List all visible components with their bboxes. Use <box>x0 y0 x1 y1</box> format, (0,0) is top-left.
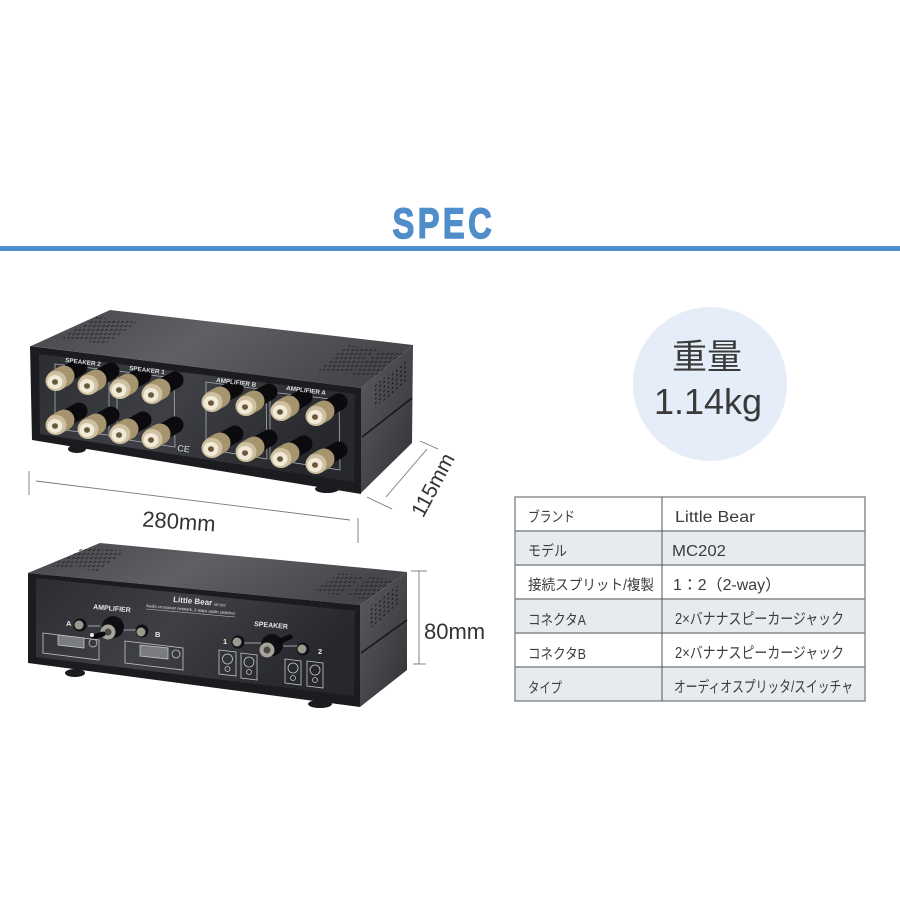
panel labels: Little Bear MC202 <box>173 595 226 609</box>
table right column <box>672 509 853 696</box>
table right column: Little Bear <box>675 509 755 526</box>
table grid <box>515 497 865 701</box>
binding post jacks <box>46 367 79 391</box>
width dimension: 280mm <box>29 471 358 543</box>
table left column: 接続スプリット/複製 <box>528 577 654 594</box>
top face <box>28 543 407 605</box>
panel labels: SPEAKER <box>254 621 288 631</box>
product photo: rear panel with terminals <box>30 310 413 494</box>
product photo: front panel with switches <box>28 543 407 708</box>
top face <box>31 310 413 388</box>
wiring lines <box>88 626 298 646</box>
terminal labels: SPEAKER 2 <box>65 357 102 368</box>
depth dimension: 115mm <box>367 441 460 521</box>
depth dimension: 115mm: 115mm <box>407 450 460 521</box>
panel labels: A <box>66 619 72 628</box>
amplifier switch with indicators <box>74 616 148 640</box>
front face <box>30 346 361 494</box>
table right column: 1：2（2-way） <box>673 577 781 594</box>
feet <box>65 669 85 677</box>
receiver outlines <box>43 633 183 670</box>
terminal labels: CE <box>177 443 190 455</box>
height dimension: 80mm <box>411 571 485 664</box>
terminal group outlines <box>55 364 340 470</box>
table row fills <box>515 497 865 701</box>
panel labels: Audio crossover network, 2-ways audio switcher <box>146 603 236 616</box>
terminal labels: AMPLIFIER A <box>286 385 327 397</box>
panel labels: 1 <box>223 637 227 646</box>
terminal labels: SPEAKER 1 <box>129 365 166 376</box>
table right column: MC202 <box>672 543 726 560</box>
side face <box>360 572 407 707</box>
terminal labels: AMPLIFIER B <box>216 377 257 389</box>
table left column: コネクタB <box>528 646 586 663</box>
weight badge: 1.14kg <box>654 381 762 422</box>
width dimension: 280mm: 280mm <box>142 506 216 537</box>
panel labels <box>66 595 322 656</box>
weight badge: 重量 <box>672 338 742 377</box>
front face <box>28 573 360 707</box>
feet <box>68 445 86 453</box>
terminal labels <box>65 357 327 455</box>
table left column: コネクタA <box>528 612 586 629</box>
side face <box>360 345 413 494</box>
table right column: 2×バナナスピーカージャック <box>675 610 844 628</box>
panel labels: B <box>155 630 161 639</box>
table left column: ブランド <box>528 508 575 526</box>
table right column: 2×バナナスピーカージャック <box>675 644 844 662</box>
speaker switch with indicators <box>232 634 310 658</box>
table left column <box>528 508 654 697</box>
spec table <box>515 497 865 701</box>
speaker outlines <box>219 650 323 688</box>
height dimension: 80mm: 80mm <box>424 619 485 644</box>
panel labels: 2 <box>318 647 322 656</box>
table left column: モデル <box>528 542 567 560</box>
title: SPEC: SPEC <box>392 200 495 248</box>
table left column: タイプ <box>528 680 562 697</box>
weight badge <box>633 307 787 461</box>
panel labels: AMPLIFIER <box>93 604 131 614</box>
heading rule <box>0 246 900 251</box>
